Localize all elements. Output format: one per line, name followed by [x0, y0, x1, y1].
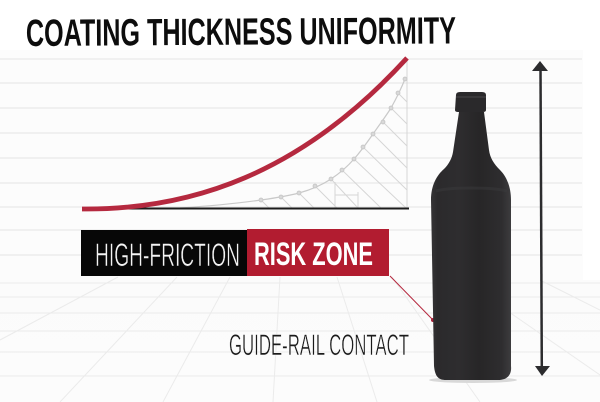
height arrow: [532, 61, 550, 376]
banner text: high-friction: HIGH-FRICTION: [95, 237, 240, 273]
chart axis: [82, 208, 409, 210]
banner text: risk zone: RISK ZONE: [254, 236, 373, 272]
banner: high-friction risk zone: [81, 229, 389, 276]
red curve: [82, 58, 407, 209]
bottle cap: [455, 92, 486, 112]
chart: thickness curve: [82, 58, 409, 209]
bottle: [429, 92, 517, 383]
leader line: [390, 276, 435, 322]
chart hatching: [261, 60, 407, 208]
grey data curve: [180, 77, 407, 208]
label: guide-rail contact: GUIDE-RAIL CONTACT: [229, 329, 409, 362]
